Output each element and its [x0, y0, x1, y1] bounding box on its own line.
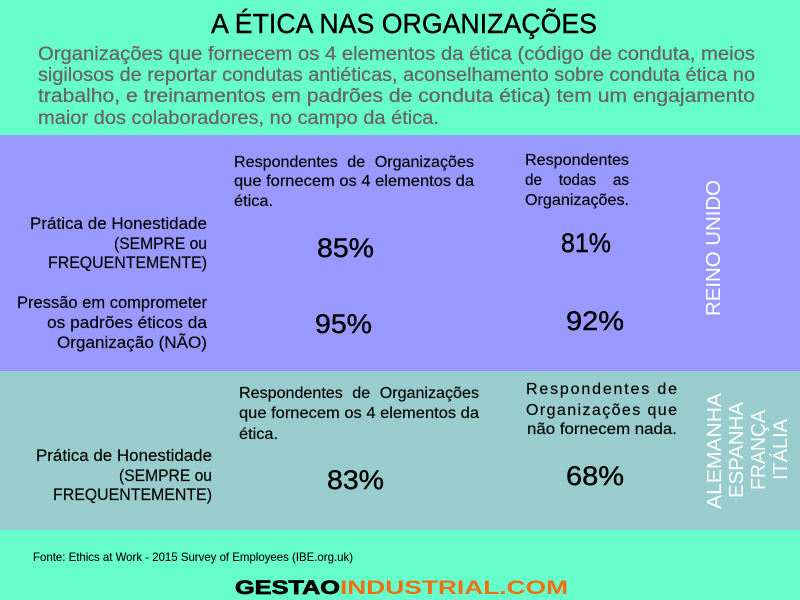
row label: honesty practice [30, 215, 207, 272]
intro text: Organizações que fornecem os 4 elementos da ética (código de conduta, meios [38, 44, 755, 65]
row label: honesty practice: (SEMPRE ou [119, 467, 212, 485]
logo: Gestao Industrial: GESTAO [235, 578, 340, 599]
column header: 4 elements: Respondentes de Organizações [239, 385, 479, 402]
panel: other countries [0, 371, 800, 530]
column header: no elements [526, 381, 677, 438]
column header: 4 elements: ética. [234, 193, 273, 210]
vertical labels: countries: ESPANHA [726, 401, 748, 498]
intro text: sigilosos de reportar condutas antiéticas, aconselhamento sobre conduta ética no [38, 65, 755, 86]
column header: 4 elements [239, 385, 479, 443]
column header: no elements: não fornecem nada. [527, 421, 677, 438]
vertical labels: countries: FRANÇA [748, 409, 770, 490]
column header: 4 elements: ética. [239, 426, 278, 443]
value: 85%: 85% [317, 233, 374, 263]
column header: 4 elements: que fornecem os 4 elementos da [239, 405, 479, 422]
logo: Gestao Industrial [235, 578, 568, 599]
column header: no elements: Organizações que [526, 402, 677, 419]
intro text: trabalho, e treinamentos em padrões de conduta ética) tem um engajamento [38, 86, 755, 107]
column header: 4 elements: que fornecem os 4 elementos da [234, 173, 474, 190]
row label: pressure [17, 294, 208, 352]
column header: all organizations [525, 152, 629, 209]
vertical labels: countries: ITÁLIA [769, 418, 792, 480]
row label: honesty practice: FREQUENTEMENTE) [53, 486, 212, 504]
value: 95%: 95% [315, 309, 372, 339]
row label: honesty practice: (SEMPRE ou [114, 235, 207, 253]
column header: all organizations: de todas as [525, 172, 629, 189]
column header: all organizations: Respondentes [525, 152, 629, 169]
row label: pressure: Organização (NÃO) [57, 332, 207, 352]
row label: honesty practice: FREQUENTEMENTE) [48, 254, 207, 272]
intro text [38, 44, 755, 129]
row label: honesty practice: Prática de Honestidade [36, 447, 212, 465]
value: 92%: 92% [566, 306, 624, 336]
vertical labels: countries [704, 392, 792, 509]
value: 83%: 83% [327, 465, 384, 495]
intro text: maior dos colaboradores, no campo da ética. [38, 108, 439, 129]
value: 81%: 81% [561, 228, 611, 258]
column header: 4 elements: Respondentes de Organizações [234, 154, 474, 171]
vertical labels: countries: ALEMANHA [704, 392, 726, 509]
panel: Reino Unido [0, 135, 800, 371]
row label: pressure: Pressão em comprometer [17, 294, 207, 312]
source note: Fonte: Ethics at Work - 2015 Survey of Employees (IBE.org.uk) [33, 550, 353, 564]
row label: pressure: os padrões éticos da [47, 314, 208, 332]
logo: Gestao Industrial: INDUSTRIAL.COM [340, 578, 568, 599]
column header: no elements: Respondentes de [526, 381, 677, 398]
vertical label: Reino Unido: REINO UNIDO [703, 180, 725, 316]
value: 68%: 68% [566, 461, 624, 491]
title: A ÉTICA NAS ORGANIZAÇÕES [211, 8, 597, 39]
row label: honesty practice: Prática de Honestidade [30, 215, 207, 233]
column header: all organizations: Organizações. [525, 192, 629, 209]
column header: 4 elements [234, 154, 474, 210]
row label: honesty practice [36, 447, 212, 504]
